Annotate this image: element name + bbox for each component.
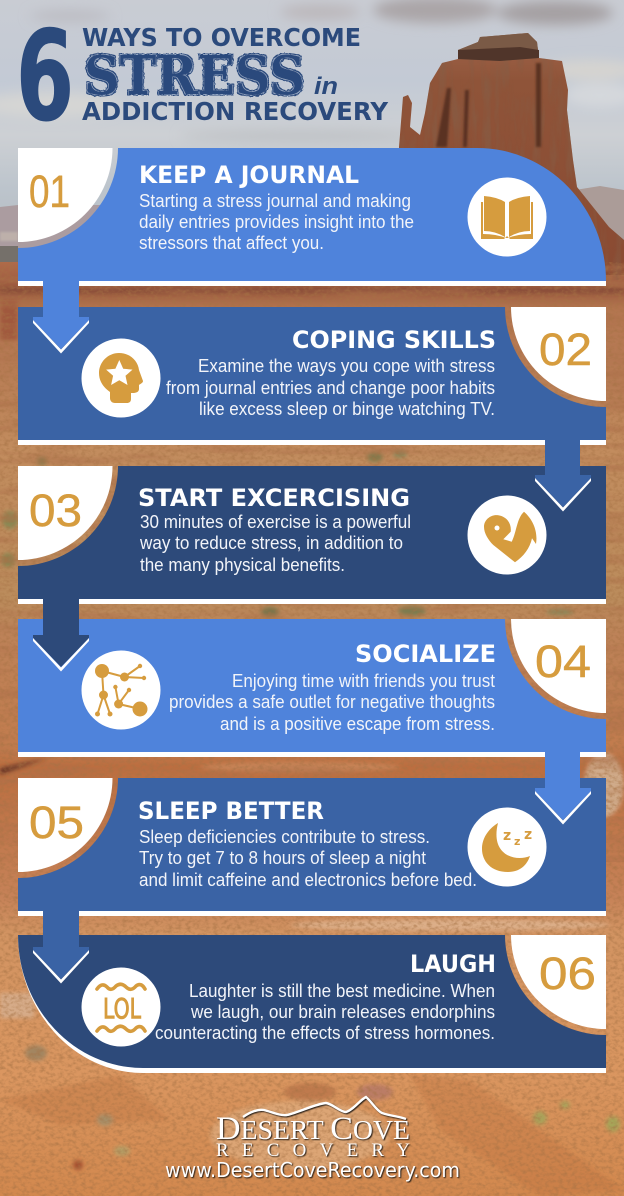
arrow: step 2 to step 3 xyxy=(535,440,591,512)
heading: LAUGH xyxy=(410,950,496,978)
body text: provides a safe outlet for negative thoughts xyxy=(169,692,495,712)
body text: Try to get 7 to 8 hours of sleep a night xyxy=(139,848,426,868)
panel shape xyxy=(18,935,606,1068)
number badge xyxy=(18,466,112,560)
panel shape xyxy=(18,619,606,752)
title word: in: in xyxy=(314,73,338,100)
body text xyxy=(139,191,414,253)
number badge xyxy=(511,619,606,713)
number 02: 02 xyxy=(539,324,592,375)
arrow: step 4 to step 5 xyxy=(535,752,591,824)
icon: crescent moon with z's: z xyxy=(514,835,520,848)
arrow: step 5 to step 6 xyxy=(33,911,89,984)
body text xyxy=(166,356,495,419)
body text: we laugh, our brain releases endorphins xyxy=(190,1002,495,1022)
logo: Desert Cove Recovery xyxy=(165,1097,460,1182)
icon: LOL with wavy lines: LOL xyxy=(103,992,141,1025)
title word: stress: STRESS xyxy=(84,45,305,107)
number 05: 05 xyxy=(29,797,84,848)
heading: KEEP A JOURNAL xyxy=(139,161,359,189)
icon: crescent moon with z's: z xyxy=(503,828,511,844)
heading: SLEEP BETTER xyxy=(138,797,324,825)
icon: mountain outline xyxy=(243,1097,406,1119)
body text: Sleep deficiencies contribute to stress. xyxy=(139,827,430,847)
body text: from journal entries and change poor habits xyxy=(166,378,495,398)
panel: 04 socialize xyxy=(18,619,606,757)
logo name: DESERT COVE xyxy=(216,1111,410,1147)
panel shape xyxy=(18,466,606,599)
body text xyxy=(155,981,495,1043)
title line: ways to overcome: WAYS TO OVERCOME xyxy=(82,23,361,52)
body text: and limit caffeine and electronics before bed. xyxy=(139,870,477,890)
icon: head with star xyxy=(82,338,160,418)
body text: stressors that affect you. xyxy=(139,233,324,253)
body text: Starting a stress journal and making xyxy=(139,191,411,211)
panel shape xyxy=(18,148,606,281)
panel shape xyxy=(18,307,606,440)
number 03: 03 xyxy=(29,485,82,536)
body text: Laughter is still the best medicine. When xyxy=(189,981,495,1001)
logo subtitle: RECOVERY xyxy=(216,1140,410,1161)
white base line xyxy=(18,281,606,286)
icon: crescent moon with z's xyxy=(468,808,546,886)
number badge xyxy=(18,778,112,872)
panel: 06 laugh xyxy=(18,935,606,1073)
white base line xyxy=(18,911,606,916)
body text: daily entries provides insight into the xyxy=(139,212,414,232)
body text xyxy=(139,512,411,575)
body text: Enjoying time with friends you trust xyxy=(232,671,495,691)
panel shape xyxy=(18,778,606,911)
heading: START EXCERCISING xyxy=(138,484,410,512)
number 01: 01 xyxy=(29,166,70,217)
panel: 01 keep a journal xyxy=(18,148,606,286)
body text: the many physical benefits. xyxy=(140,555,345,575)
body text: Examine the ways you cope with stress xyxy=(198,356,495,376)
icon: open book xyxy=(468,178,546,256)
body text xyxy=(139,827,477,890)
white base line xyxy=(18,935,606,1073)
icon: crescent moon with z's: z xyxy=(524,827,532,843)
icon: LOL with wavy lines xyxy=(82,968,160,1046)
number badge xyxy=(18,148,112,242)
body text: 30 minutes of exercise is a powerful xyxy=(140,512,411,532)
white base line xyxy=(18,752,606,757)
number 06: 06 xyxy=(539,948,596,999)
body text xyxy=(169,671,495,734)
arrow: step 3 to step 4 xyxy=(33,599,89,672)
body text: and is a positive escape from stress. xyxy=(220,714,495,734)
body text: way to reduce stress, in addition to xyxy=(139,533,403,553)
heading: SOCIALIZE xyxy=(355,640,496,668)
white base line xyxy=(18,440,606,445)
panel: 02 coping skills xyxy=(18,307,606,445)
panel: 03 start exercising xyxy=(18,466,606,604)
heading: COPING SKILLS xyxy=(292,326,496,354)
title line: addiction recovery: ADDICTION RECOVERY xyxy=(82,97,389,126)
website address: www.DesertCoveRecovery.com xyxy=(165,1158,460,1182)
title numeral 6: 6 xyxy=(16,5,74,149)
white base line xyxy=(18,599,606,604)
icon: social network xyxy=(82,650,160,730)
panel: 05 sleep better xyxy=(18,778,606,916)
number badge xyxy=(511,307,606,401)
number 04: 04 xyxy=(535,636,591,687)
body text: like excess sleep or binge watching TV. xyxy=(199,399,495,419)
number badge xyxy=(511,935,606,1029)
body text: counteracting the effects of stress hormones. xyxy=(155,1023,495,1043)
icon: flexed muscle heart xyxy=(468,496,546,574)
arrow: step 1 to step 2 xyxy=(33,281,89,354)
title xyxy=(16,5,389,149)
